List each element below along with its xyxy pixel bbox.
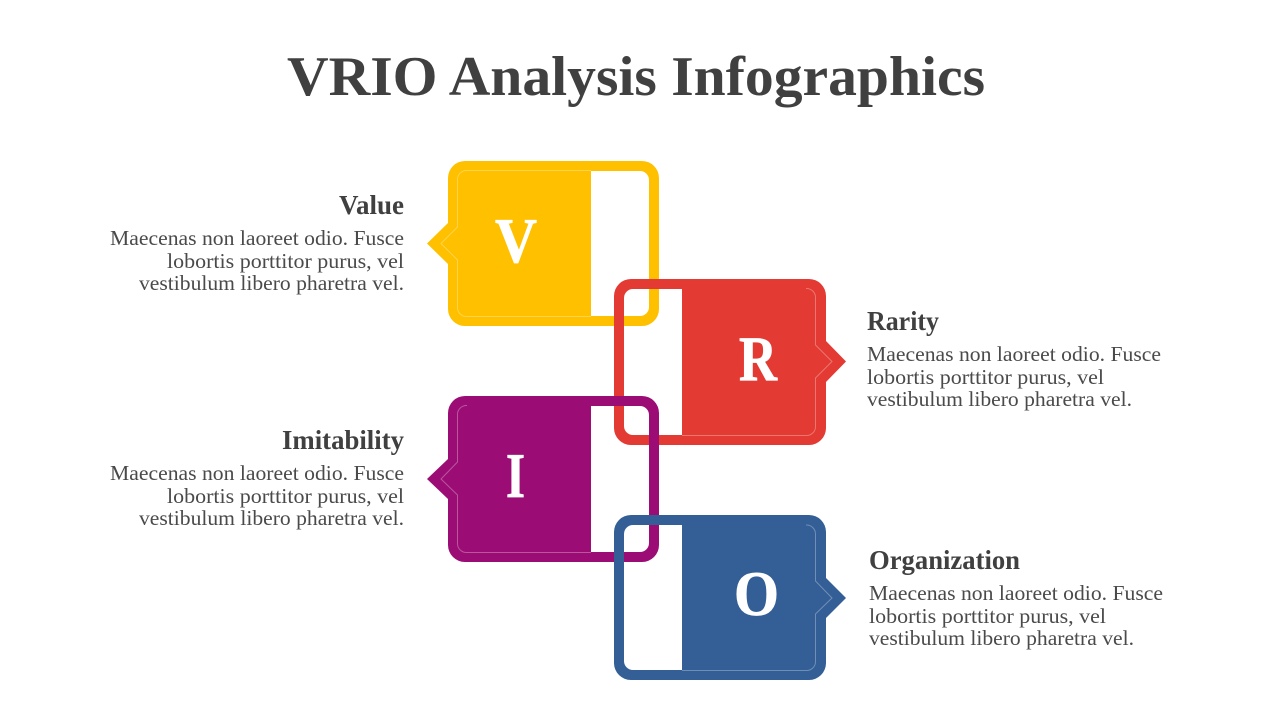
card: R bbox=[614, 279, 846, 445]
text block: value description: vestibulum libero pharetra vel. bbox=[139, 271, 404, 295]
text block: rarity description bbox=[867, 342, 1161, 411]
text block: value description bbox=[110, 226, 404, 295]
text block: organization description: Maecenas non laoreet odio. Fusce bbox=[869, 581, 1163, 605]
text block: imitability description: Maecenas non laoreet odio. Fusce bbox=[110, 461, 404, 485]
card: V bbox=[427, 161, 659, 326]
heading: rarity: Rarity bbox=[867, 305, 939, 336]
text block: imitability description bbox=[110, 461, 404, 530]
text block: organization description: vestibulum libero pharetra vel. bbox=[869, 626, 1134, 650]
text block: rarity description: Maecenas non laoreet odio. Fusce bbox=[867, 342, 1161, 366]
heading: imitability: Imitability bbox=[282, 424, 404, 455]
panel: imitability text bbox=[110, 424, 404, 530]
card: O bbox=[614, 515, 846, 680]
letter I: I bbox=[506, 441, 525, 511]
title: VRIO Analysis Infographics bbox=[287, 46, 985, 108]
text block: rarity description: lobortis porttitor purus, vel bbox=[867, 365, 1104, 389]
heading: organization: Organization bbox=[869, 544, 1020, 575]
text block: value description: Maecenas non laoreet odio. Fusce bbox=[110, 226, 404, 250]
panel: organization text bbox=[869, 544, 1163, 650]
panel: value text bbox=[110, 189, 404, 295]
panel: rarity text bbox=[867, 305, 1161, 411]
letter V: V bbox=[495, 206, 537, 276]
text block: organization description: lobortis porttitor purus, vel bbox=[869, 604, 1106, 628]
text block: rarity description: vestibulum libero pharetra vel. bbox=[867, 387, 1132, 411]
card: I bbox=[427, 396, 659, 562]
text block: value description: lobortis porttitor purus, vel bbox=[167, 249, 404, 273]
letter R: R bbox=[739, 324, 778, 394]
letter O: O bbox=[734, 559, 779, 629]
text block: organization description bbox=[869, 581, 1163, 650]
text block: imitability description: vestibulum libero pharetra vel. bbox=[139, 506, 404, 530]
text block: imitability description: lobortis porttitor purus, vel bbox=[167, 484, 404, 508]
heading: value: Value bbox=[339, 189, 404, 220]
